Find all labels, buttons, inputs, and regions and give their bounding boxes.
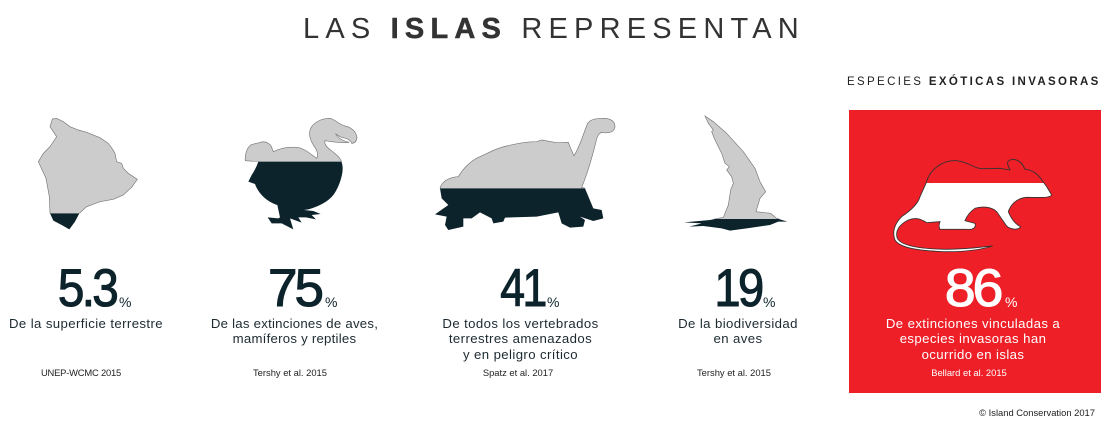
stat: 5.3: % (119, 294, 131, 310)
description: 86: especies invasoras han (900, 331, 1046, 346)
stat: 41: % (547, 294, 559, 310)
source: 19: Tershy et al. 2015 (697, 367, 771, 378)
description: 19 (678, 316, 798, 346)
stat: 5.3: 5.3 (58, 259, 116, 318)
description: 41: De todos los vertebrados (442, 316, 599, 330)
title: LAS ISLAS REPRESENTAN (303, 13, 805, 45)
icon: island (38, 118, 137, 229)
description: 41: y en peligro crítico (463, 346, 578, 362)
stat: 41: 41 (500, 259, 545, 318)
description: 41 (442, 316, 599, 362)
description: 19: De la biodiversidad (678, 316, 798, 330)
description: 75: De las extinciones de aves, (211, 316, 378, 330)
stat: 19: % (763, 294, 775, 310)
description: 86 (886, 316, 1060, 362)
icon: rat (894, 159, 1052, 252)
source: 41: Spatz et al. 2017 (483, 367, 553, 378)
icon: dodo (245, 118, 357, 229)
description: 19: en aves (714, 331, 762, 346)
stat: 19: 19 (714, 259, 762, 318)
stat: 75: 75 (268, 259, 321, 318)
copyright: © Island Conservation 2017 (979, 407, 1095, 418)
icon: tortoise (435, 118, 615, 230)
red panel background (849, 110, 1101, 393)
description: 41: terrestres amenazados (449, 331, 592, 346)
description: 5.3: De la superficie terrestre (9, 316, 163, 330)
source: 86: Bellard et al. 2015 (931, 367, 1007, 378)
stat: 86: 86 (945, 259, 1000, 318)
source: 75: Tershy et al. 2015 (253, 367, 327, 378)
red panel heading: ESPECIES EXÓTICAS INVASORAS (847, 76, 1101, 88)
description: 75 (211, 316, 378, 346)
description: 86: De extinciones vinculadas a (886, 316, 1060, 330)
icon: seabird (684, 116, 787, 231)
source: 5.3: UNEP-WCMC 2015 (41, 367, 121, 378)
description: 86: ocurrido en islas (922, 346, 1024, 362)
description: 75: mamíferos y reptiles (233, 331, 356, 346)
stat: 75: % (325, 294, 337, 310)
stat: 86: % (1005, 294, 1017, 310)
silhouette icons (38, 115, 1052, 252)
